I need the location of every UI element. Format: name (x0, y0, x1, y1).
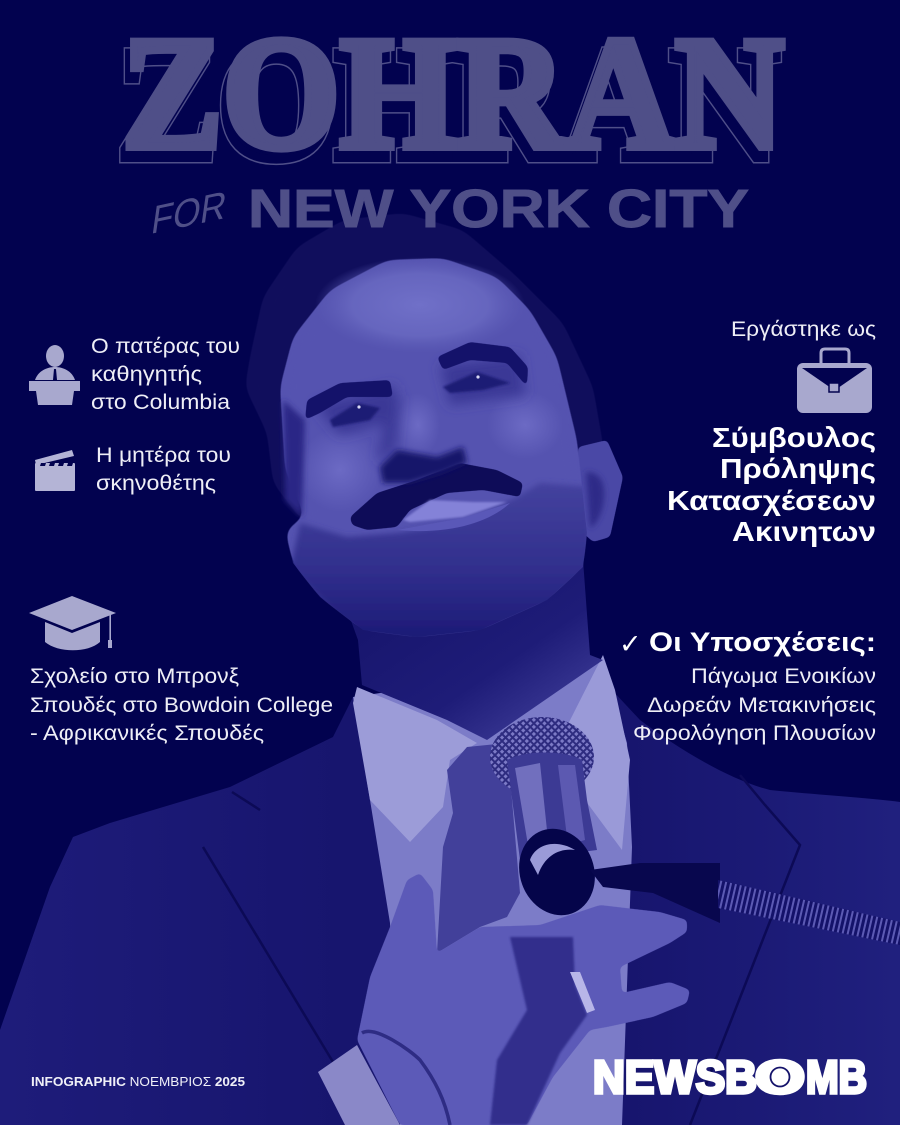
text: father (91, 335, 240, 414)
text: job title: Ακινητων (732, 516, 876, 547)
text: father: Ο πατέρας του (91, 335, 240, 358)
text: pledges (619, 627, 876, 745)
text: pledges: Φορολόγηση Πλουσίων (633, 722, 876, 745)
text: mother (96, 444, 231, 495)
text: education: Σχολείο στο Μπρονξ (30, 665, 239, 688)
left face shadow (283, 400, 305, 517)
text: job title: Κατασχέσεων (667, 485, 876, 516)
forehead highlight (315, 257, 525, 353)
brows (305, 342, 528, 420)
face (280, 258, 587, 637)
mustache (350, 463, 523, 530)
subtitle: for New York City (149, 179, 749, 243)
text: education: - Αφρικανικές Σπουδές (30, 722, 264, 745)
text: worked as: Εργάστηκε ως (731, 318, 876, 341)
text: mother: Η μητέρα του (96, 444, 231, 467)
footer date: INFOGRAPHIC ΝΟΕΜΒΡΙΟΣ 2025 (31, 1075, 245, 1089)
jacket lapels (203, 775, 800, 1125)
text: pledges: Οι Υποσχέσεις: (649, 627, 876, 657)
text: father: στο Columbia (91, 391, 230, 414)
text: job title: Σύμβουλος (712, 422, 876, 453)
icon: graduation cap (29, 596, 116, 650)
text: education (30, 665, 333, 745)
hand (357, 873, 690, 1125)
text: father: καθηγητής (91, 363, 202, 386)
text: pledges: Πάγωμα Ενοικίων (691, 665, 876, 688)
beard (290, 483, 590, 645)
microphone (490, 717, 900, 945)
head hair (245, 213, 604, 522)
subtitle: for New York City: FOR (149, 182, 229, 243)
ear inner shadow (586, 472, 604, 528)
text: pledges: ✓ (619, 629, 642, 660)
jacket (0, 690, 900, 1125)
cuff and bracelet (318, 1031, 450, 1125)
eye socket shading (315, 355, 525, 462)
title: ZOHRAN: ZOHRAN (117, 15, 779, 193)
text: mother: σκηνοθέτης (96, 472, 216, 495)
title: ZOHRAN: ZOHRAN (122, 4, 784, 182)
logo: Newsbomb (593, 1051, 867, 1103)
nose shadow (380, 447, 467, 483)
neck (340, 560, 603, 740)
teeth (403, 500, 507, 522)
subtitle: for New York City: NEW YORK CITY (248, 179, 749, 239)
icon: lectern speaker (29, 345, 80, 405)
icon: clapperboard (35, 450, 75, 491)
shirt (353, 655, 632, 1125)
text: pledges: Δωρεάν Μετακινήσεις (647, 694, 876, 717)
lower lip (397, 503, 510, 531)
ear right (578, 440, 623, 542)
eyes (330, 372, 510, 427)
logo: Newsbomb: MB (806, 1051, 867, 1103)
tie (437, 743, 520, 953)
text: job title (667, 422, 876, 547)
title: ZOHRAN: ZOHRAN (117, 15, 779, 193)
icon: briefcase (797, 349, 872, 413)
text: job title: Πρόληψης (720, 453, 876, 484)
logo: Newsbomb: NEWSB (593, 1051, 757, 1103)
logo: Newsbomb: O (755, 1051, 805, 1103)
cheek highlights (298, 391, 563, 512)
text: education: Σπουδές στο Bowdoin College (30, 694, 333, 717)
